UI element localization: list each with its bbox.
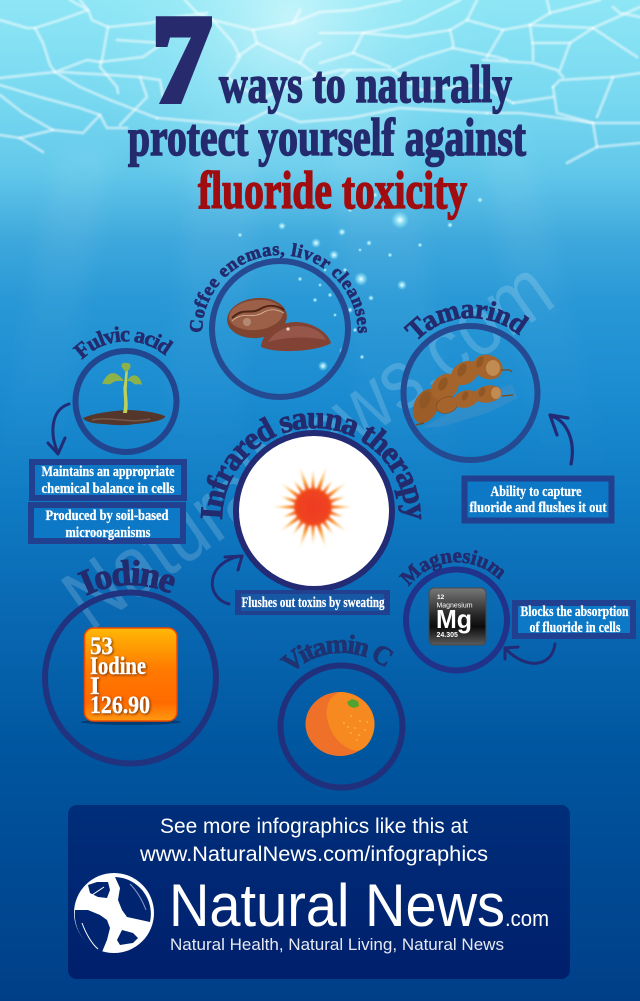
icon: iodine element tile: Iodine xyxy=(90,653,146,680)
callout: soil-based microorganisms xyxy=(31,505,183,541)
panel: iodine xyxy=(42,559,219,766)
callout: flushes out toxins xyxy=(235,590,390,615)
icon: orange xyxy=(306,692,374,756)
callout: magnesium xyxy=(515,603,633,636)
sparkles xyxy=(238,188,483,371)
callout: flushes out toxins: Flushes out toxins by sweating xyxy=(242,595,385,611)
water caustics pattern xyxy=(0,0,640,163)
arrow: magnesium xyxy=(505,644,555,663)
title line: ways to naturally: ways to naturally xyxy=(219,56,512,114)
arrow: tamarind xyxy=(550,415,572,464)
logo: globe xyxy=(74,873,154,953)
callout: tamarind: fluoride and flushes it out xyxy=(470,500,607,516)
panel: vitamin c xyxy=(278,634,406,790)
panel: fulvic acid xyxy=(72,326,180,455)
icon: iodine element tile: 126.90 xyxy=(90,692,150,719)
ring: coffee xyxy=(212,261,348,397)
heading: tamarind: Tamarind xyxy=(403,301,530,340)
footer text: url: www.NaturalNews.com/infographics xyxy=(139,843,488,866)
ring: magnesium xyxy=(406,570,507,670)
logo .com: .com xyxy=(505,906,549,931)
heading: fulvic acid: Fulvic acid xyxy=(72,326,174,360)
icon: sprout xyxy=(83,363,165,425)
icon: coffee beans xyxy=(225,295,331,351)
icon: iodine element tile xyxy=(81,628,181,725)
icon: tamarind pods xyxy=(408,351,518,428)
ring: fulvic acid xyxy=(76,351,176,452)
icon: iodine element tile: 53 xyxy=(90,633,113,660)
panel: magnesium xyxy=(398,550,510,674)
icon: infrared burst xyxy=(271,465,353,551)
callout: soil-based microorganisms: microorganisms xyxy=(66,525,151,541)
arrow: sauna xyxy=(212,556,242,604)
ring: vitamin c xyxy=(280,666,402,788)
callout: tamarind: Ability to capture xyxy=(490,484,582,500)
callout: maintains chemical balance: chemical balance in cells xyxy=(42,481,175,497)
heading: iodine: Iodine xyxy=(77,559,175,596)
icon: magnesium element tile xyxy=(429,588,486,645)
heading: vitamin c: Vitamin C xyxy=(280,634,394,669)
icon: magnesium element tile: 24.305 xyxy=(436,632,458,639)
callout: maintains chemical balance: Maintains an appropriate xyxy=(42,464,175,480)
icon: magnesium element tile: Mg xyxy=(436,604,472,634)
logo wordmark: Natural News xyxy=(169,872,505,939)
title line: fluoride toxicity: fluoride toxicity xyxy=(198,162,467,220)
title xyxy=(128,0,526,220)
callout: soil-based microorganisms: Produced by soil-based xyxy=(46,508,168,524)
panel: tamarind xyxy=(400,301,540,463)
ring: sauna xyxy=(236,433,392,589)
heading: coffee: Coffee enemas, liver cleanses xyxy=(190,242,367,334)
ring: tamarind xyxy=(404,326,538,460)
footer text: see more: See more infographics like this at xyxy=(160,815,468,838)
callout: tamarind xyxy=(464,478,612,520)
ring: iodine xyxy=(45,592,216,764)
panel: infrared sauna therapy xyxy=(200,412,422,590)
icon: magnesium element tile: 12 xyxy=(437,594,445,601)
panel: coffee enemas, liver cleanses xyxy=(190,242,367,400)
callout: maintains chemical balance xyxy=(32,462,184,498)
heading: magnesium: Magnesium xyxy=(398,550,504,586)
callout: magnesium: of fluoride in cells xyxy=(530,620,621,636)
panel: footer xyxy=(68,805,570,979)
icon: magnesium element tile: Magnesium xyxy=(436,602,473,610)
icon: iodine element tile: I xyxy=(90,673,100,700)
watermark: NaturalNews.com: NaturalNews.com xyxy=(46,241,569,648)
arrow: fulvic acid xyxy=(48,404,69,454)
heading: infrared sauna therapy: Infrared sauna therapy xyxy=(200,412,422,520)
logo tagline: Natural Health, Natural Living, Natural News xyxy=(170,935,504,954)
